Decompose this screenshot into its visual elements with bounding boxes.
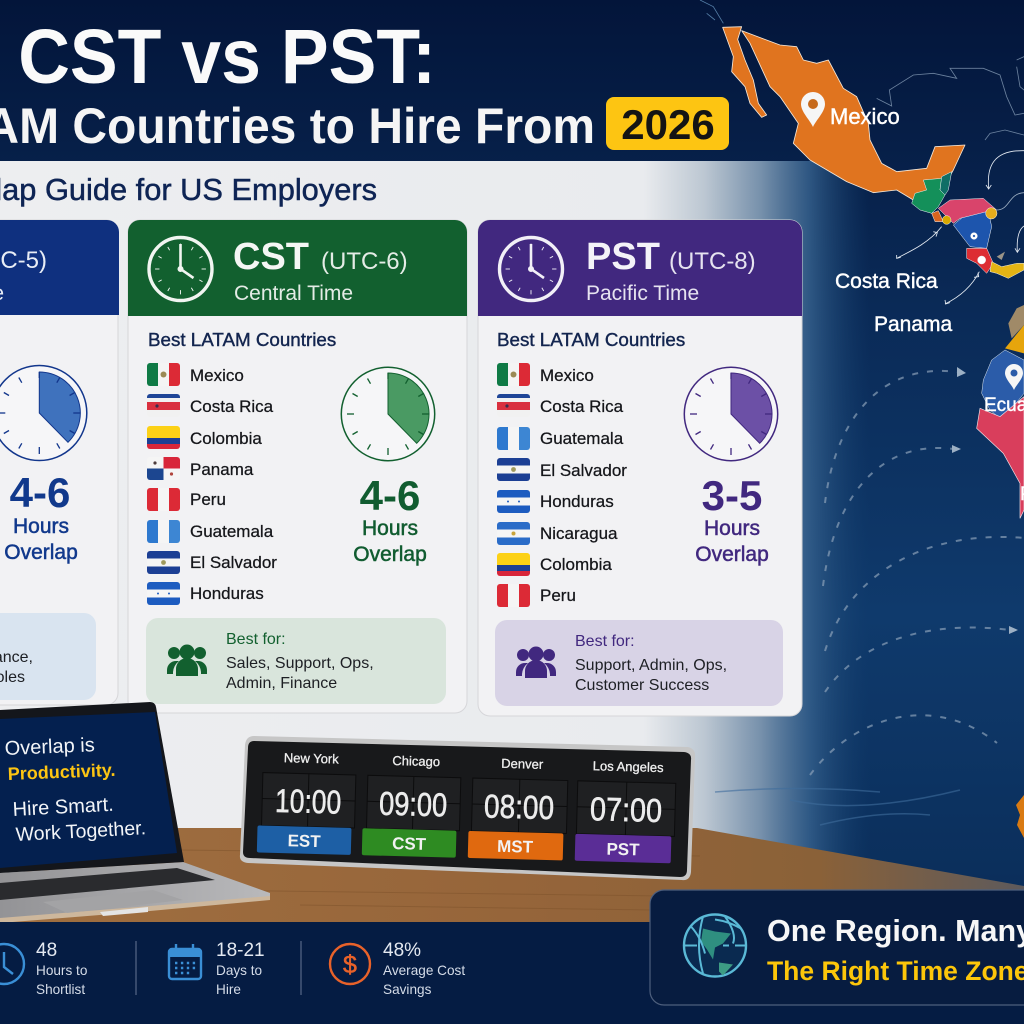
CST overlap text: 4-6 — [360, 472, 420, 519]
divider — [300, 941, 302, 995]
EST overlap text: Overlap — [4, 541, 78, 564]
map label: Panama: Panama — [874, 313, 953, 336]
CST country list: Panama — [190, 460, 254, 479]
CST overlap text: Hours — [362, 517, 418, 540]
PST overlap text: 3-5 — [702, 472, 762, 519]
dashed overlap arcs — [810, 367, 1024, 775]
clock: Chicago: 09:00 — [379, 785, 448, 823]
EST best for box — [0, 613, 96, 700]
laptop bezel — [0, 702, 184, 873]
panel: CST — [128, 220, 467, 713]
CST country list: Mexico — [190, 366, 244, 385]
PST header — [478, 220, 802, 316]
CST overlap text: Overlap — [353, 543, 427, 566]
screen text: Productivity. — [7, 760, 116, 784]
CST header: (UTC-6) — [321, 248, 408, 275]
PST header: Pacific Time — [586, 282, 699, 305]
EST header — [0, 220, 119, 315]
PST overlap text: Hours — [704, 517, 760, 540]
PST country list: Guatemala — [540, 429, 624, 448]
PST best for box: Best for: — [575, 633, 635, 650]
clock: Los Angeles: Los Angeles — [593, 758, 664, 775]
laptop — [0, 702, 270, 923]
stat: days to hire — [169, 940, 265, 997]
laptop screen — [0, 712, 177, 868]
PST overlap clock — [684, 367, 778, 461]
screen text: Overlap is — [4, 734, 95, 760]
world clock device — [240, 736, 695, 880]
clock: Denver — [468, 755, 568, 861]
CST header: Central Time — [234, 282, 353, 305]
clock: New York: 10:00 — [275, 782, 342, 821]
icon: globe — [684, 914, 746, 976]
trackpad — [43, 890, 183, 913]
icon: people — [516, 646, 556, 678]
stat: cost savings: 48% — [383, 940, 421, 961]
screen text — [4, 734, 147, 846]
CST header: CST — [233, 236, 309, 278]
CST country list: Guatemala — [190, 522, 274, 541]
EST overlap text: Hours — [13, 515, 69, 538]
PST header: PST — [586, 236, 660, 278]
coastline outlines — [700, 0, 1024, 140]
CST overlap text — [353, 472, 427, 566]
PST country list: Nicaragua — [540, 524, 618, 543]
CST overlap clock — [341, 367, 435, 461]
orange island detail — [1016, 795, 1024, 838]
ocean highlights — [715, 788, 960, 825]
PST country list: El Salvador — [540, 461, 627, 480]
PST country list: Costa Rica — [540, 397, 624, 416]
footer bar — [0, 922, 1024, 1024]
laptop base — [0, 862, 270, 922]
map: Mexico and Central America — [700, 0, 1024, 304]
keyboard — [0, 868, 215, 900]
clock: Chicago: Chicago — [392, 753, 440, 769]
PST country list: Mexico — [540, 366, 594, 385]
clock: Denver: Denver — [501, 756, 544, 772]
CST country list: Colombia — [190, 429, 262, 448]
icon: people — [167, 644, 207, 676]
stat: cost savings — [330, 940, 465, 997]
stat: hours to shortlist — [0, 940, 87, 997]
CST best for box — [146, 618, 446, 704]
icon: dollar: $ — [343, 951, 357, 979]
stat: cost savings: Savings — [383, 982, 432, 997]
icon: map pin — [1005, 364, 1023, 390]
stat: days to hire: Hire — [216, 982, 241, 997]
CST country list: Best LATAM Countries — [148, 329, 336, 350]
stat: hours to shortlist: 48 — [36, 940, 57, 961]
CST country list: El Salvador — [190, 553, 277, 572]
PST overlap text: Overlap — [695, 543, 769, 566]
leader arrows — [897, 151, 1024, 304]
CST best for box: Sales, Support, Ops, — [226, 655, 374, 672]
Mexico — [723, 27, 965, 200]
Central American countries — [912, 172, 1024, 278]
title — [0, 14, 595, 154]
divider — [135, 941, 137, 995]
stat: hours to shortlist: Hours to — [36, 963, 87, 978]
map: South America — [977, 252, 1024, 518]
year badge: 2026 — [621, 101, 715, 148]
stat: days to hire: 18-21 — [216, 940, 265, 961]
PST country list — [497, 329, 685, 607]
screen text: Hire Smart. — [12, 794, 114, 821]
CST country list — [147, 329, 336, 605]
icon: clock — [0, 944, 24, 984]
screen text: Work Together. — [15, 817, 147, 846]
stat: hours to shortlist: Shortlist — [36, 982, 85, 997]
PST overlap text — [695, 472, 769, 566]
CST country list: Honduras — [190, 584, 264, 603]
stat: days to hire: Days to — [216, 963, 262, 978]
stat: cost savings: Average Cost — [383, 963, 465, 978]
PST country list: Peru — [540, 586, 576, 605]
icon: clock — [149, 238, 212, 300]
CST country list: Peru — [190, 490, 226, 509]
panel: EST — [0, 220, 119, 705]
panel: PST — [478, 220, 802, 716]
CST country list: Costa Rica — [190, 397, 274, 416]
year badge — [606, 97, 729, 150]
PST best for box — [495, 620, 783, 706]
clock: Los Angeles: PST — [606, 840, 640, 859]
clock: Denver: 08:00 — [484, 787, 555, 826]
clock: New York: EST — [287, 831, 322, 851]
PST country list: Honduras — [540, 492, 614, 511]
clock: New York — [257, 749, 356, 855]
table top — [0, 828, 1024, 922]
clock: Los Angeles: 07:00 — [590, 790, 663, 829]
map label: Ecuador — [984, 364, 1024, 416]
map label: Mexico — [801, 92, 900, 129]
icon: map pin — [801, 92, 825, 127]
CST header — [128, 220, 467, 316]
CST best for box: Best for: — [226, 631, 286, 648]
map label: Mexico: Mexico — [830, 104, 900, 129]
PST country list: Best LATAM Countries — [497, 329, 685, 350]
EST overlap text: 4-6 — [10, 469, 70, 516]
EST overlap text — [4, 469, 78, 564]
CST card body — [128, 220, 467, 713]
PST best for box: Support, Admin, Ops, — [575, 657, 727, 674]
clock: New York: New York — [284, 750, 339, 767]
icon: clock — [500, 238, 562, 300]
PST country list: Colombia — [540, 555, 612, 574]
CST best for box: Admin, Finance — [226, 675, 337, 692]
EST overlap clock — [0, 366, 87, 460]
PST header: (UTC-8) — [669, 248, 756, 275]
clock: Chicago: CST — [392, 834, 427, 854]
icon: calendar — [169, 944, 201, 979]
light wall panel — [0, 161, 870, 922]
clock: Denver: MST — [497, 837, 534, 857]
EST card body — [0, 220, 118, 705]
clock: Los Angeles — [575, 758, 676, 863]
PST card body — [478, 220, 802, 716]
clock: Chicago — [362, 752, 461, 858]
PST best for box: Customer Success — [575, 677, 709, 694]
map label: Costa Rica: Costa Rica — [835, 270, 938, 293]
callout — [650, 890, 1024, 1005]
